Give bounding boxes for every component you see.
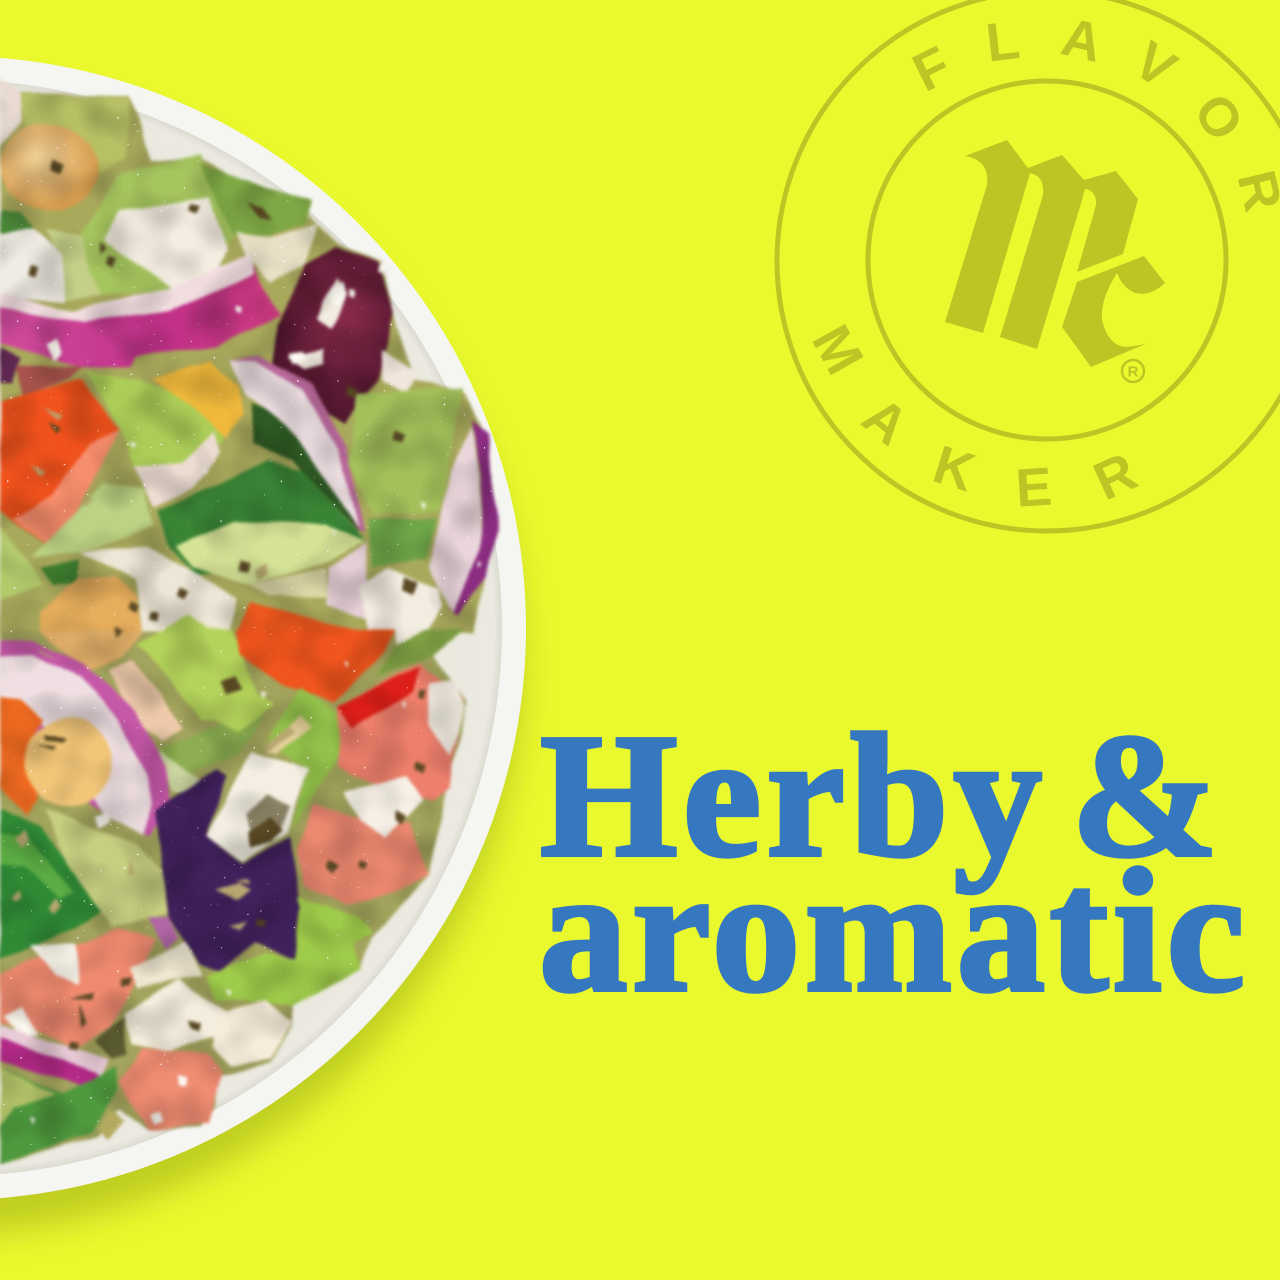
lettuce right: [348, 387, 463, 514]
pale lettuce lower left: [30, 485, 155, 558]
almond sliver: [264, 717, 313, 754]
leaf top right: [375, 630, 463, 677]
tomato pale edge: [14, 427, 122, 551]
pale lettuce tip: [44, 808, 201, 926]
curved paths for lettering: [926, 56, 1252, 331]
dark oregano flecks: [28, 160, 426, 1050]
feta on tomato: [429, 681, 465, 754]
headline line one: &: [1071, 698, 1218, 894]
tomato top of lower half: [237, 602, 372, 634]
onion right flesh: [429, 427, 482, 613]
dark leaf lower left: [41, 558, 81, 587]
tomato pink: [338, 663, 463, 803]
lettuce bottom centre: [162, 616, 216, 634]
olive: [274, 245, 394, 424]
onion arc flesh: [230, 360, 359, 529]
tomato lower: [297, 804, 429, 904]
feta on olive: [206, 750, 308, 861]
onion band flesh: [0, 254, 254, 322]
onion under cucumber: [326, 543, 367, 620]
icon: registered mark: [1122, 360, 1144, 382]
dark purple lump left: [0, 347, 20, 384]
FLAVOR MAKER logo badge: [774, 0, 1280, 534]
onion arc flesh: [0, 656, 152, 835]
plate of Greek salad: [0, 56, 526, 1200]
feta right: [358, 569, 443, 634]
feta second: [213, 1001, 294, 1066]
inner ring: [868, 81, 1226, 439]
plate well: [0, 80, 502, 1176]
feta top right: [395, 630, 426, 645]
tomato left: [0, 380, 122, 551]
light lettuce centre: [84, 373, 226, 467]
icon: registered mark: R: [1128, 364, 1139, 380]
cucumber flesh: [176, 522, 365, 583]
dark gap near onion: [95, 1015, 127, 1059]
pale onion top left: [0, 78, 24, 147]
onion arc skin: [230, 356, 365, 533]
chickpea centre: [152, 360, 243, 438]
salad base mass: [0, 93, 495, 634]
light herb flecks: [12, 405, 296, 929]
icon: Mc monogram c: [1062, 256, 1165, 367]
darker lettuce right: [199, 164, 311, 236]
feta crumb right: [382, 347, 419, 394]
onion flesh lower: [0, 1024, 108, 1092]
chickpea pale: [108, 663, 183, 743]
text: MAKER: MAKER: [812, 324, 1140, 506]
feta small: [30, 943, 78, 986]
tomato bottom: [118, 1048, 223, 1132]
headline line one: Herby: [540, 698, 1042, 894]
olive crumb lower: [289, 347, 324, 369]
cucumber flesh bottom: [0, 1066, 57, 1128]
tomato big: [237, 630, 395, 703]
feta cube: [105, 198, 226, 289]
red piece behind tomato: [17, 365, 81, 394]
salad upper half: [0, 78, 497, 634]
icon: Mc monogram m: [945, 140, 1138, 349]
feta left: [0, 231, 66, 302]
lettuce deep: [159, 703, 270, 775]
lettuce with feta: [81, 155, 237, 296]
salad food pile: [0, 78, 497, 1164]
plate shadow: [0, 90, 522, 1234]
herb bit: [98, 1110, 123, 1139]
lettuce far left: [0, 525, 44, 602]
cucumber skin: [159, 460, 365, 576]
lettuce lower right: [368, 518, 436, 569]
cucumber bottom: [0, 1066, 117, 1164]
lettuce lower: [206, 895, 372, 1004]
feta tiny left: [3, 1004, 41, 1037]
onion sliver: [149, 917, 179, 950]
plate rim: [0, 56, 526, 1200]
onion band skin: [0, 264, 281, 369]
crumbled cheese: [237, 224, 318, 282]
purple olive: [155, 768, 301, 972]
lettuce right: [264, 688, 345, 834]
dark leaf shadow: [252, 405, 358, 533]
onion piece: [135, 431, 220, 507]
herb patch on feta: [247, 794, 291, 834]
feta centre: [345, 775, 422, 837]
chickpea: [25, 719, 112, 806]
headline line two: aromatic: [539, 833, 1245, 1029]
feta crumbled centre: [81, 547, 237, 634]
chickpea lower: [41, 576, 142, 634]
lettuce top: [22, 95, 128, 173]
orange tomato left: [0, 697, 44, 815]
lettuce curly: [135, 630, 274, 732]
salad base mass: [0, 630, 466, 1164]
onion skin lower: [0, 1037, 98, 1091]
cheese below cucumber: [250, 569, 328, 598]
salad lower half: [0, 630, 466, 1164]
onion right skin: [450, 420, 497, 616]
chickpea top: [0, 124, 98, 210]
olive cheese crumbs: [316, 278, 346, 329]
tomato red: [338, 666, 419, 728]
tomato left lower: [0, 928, 155, 1048]
pale lettuce left: [44, 231, 101, 300]
herb flecks and specks: [12, 160, 483, 1125]
top chickpea: [41, 630, 142, 670]
white specks: [20, 265, 483, 1125]
onion arc skin: [0, 641, 171, 837]
cucumber stripes: [0, 834, 74, 899]
headline: [539, 698, 1245, 1029]
dark leaf far left: [0, 209, 34, 234]
feta back: [128, 943, 203, 990]
feta big: [125, 979, 226, 1052]
outer ring: [777, 0, 1280, 531]
pale lettuce under onion: [159, 750, 210, 794]
cucumber left: [0, 808, 105, 957]
